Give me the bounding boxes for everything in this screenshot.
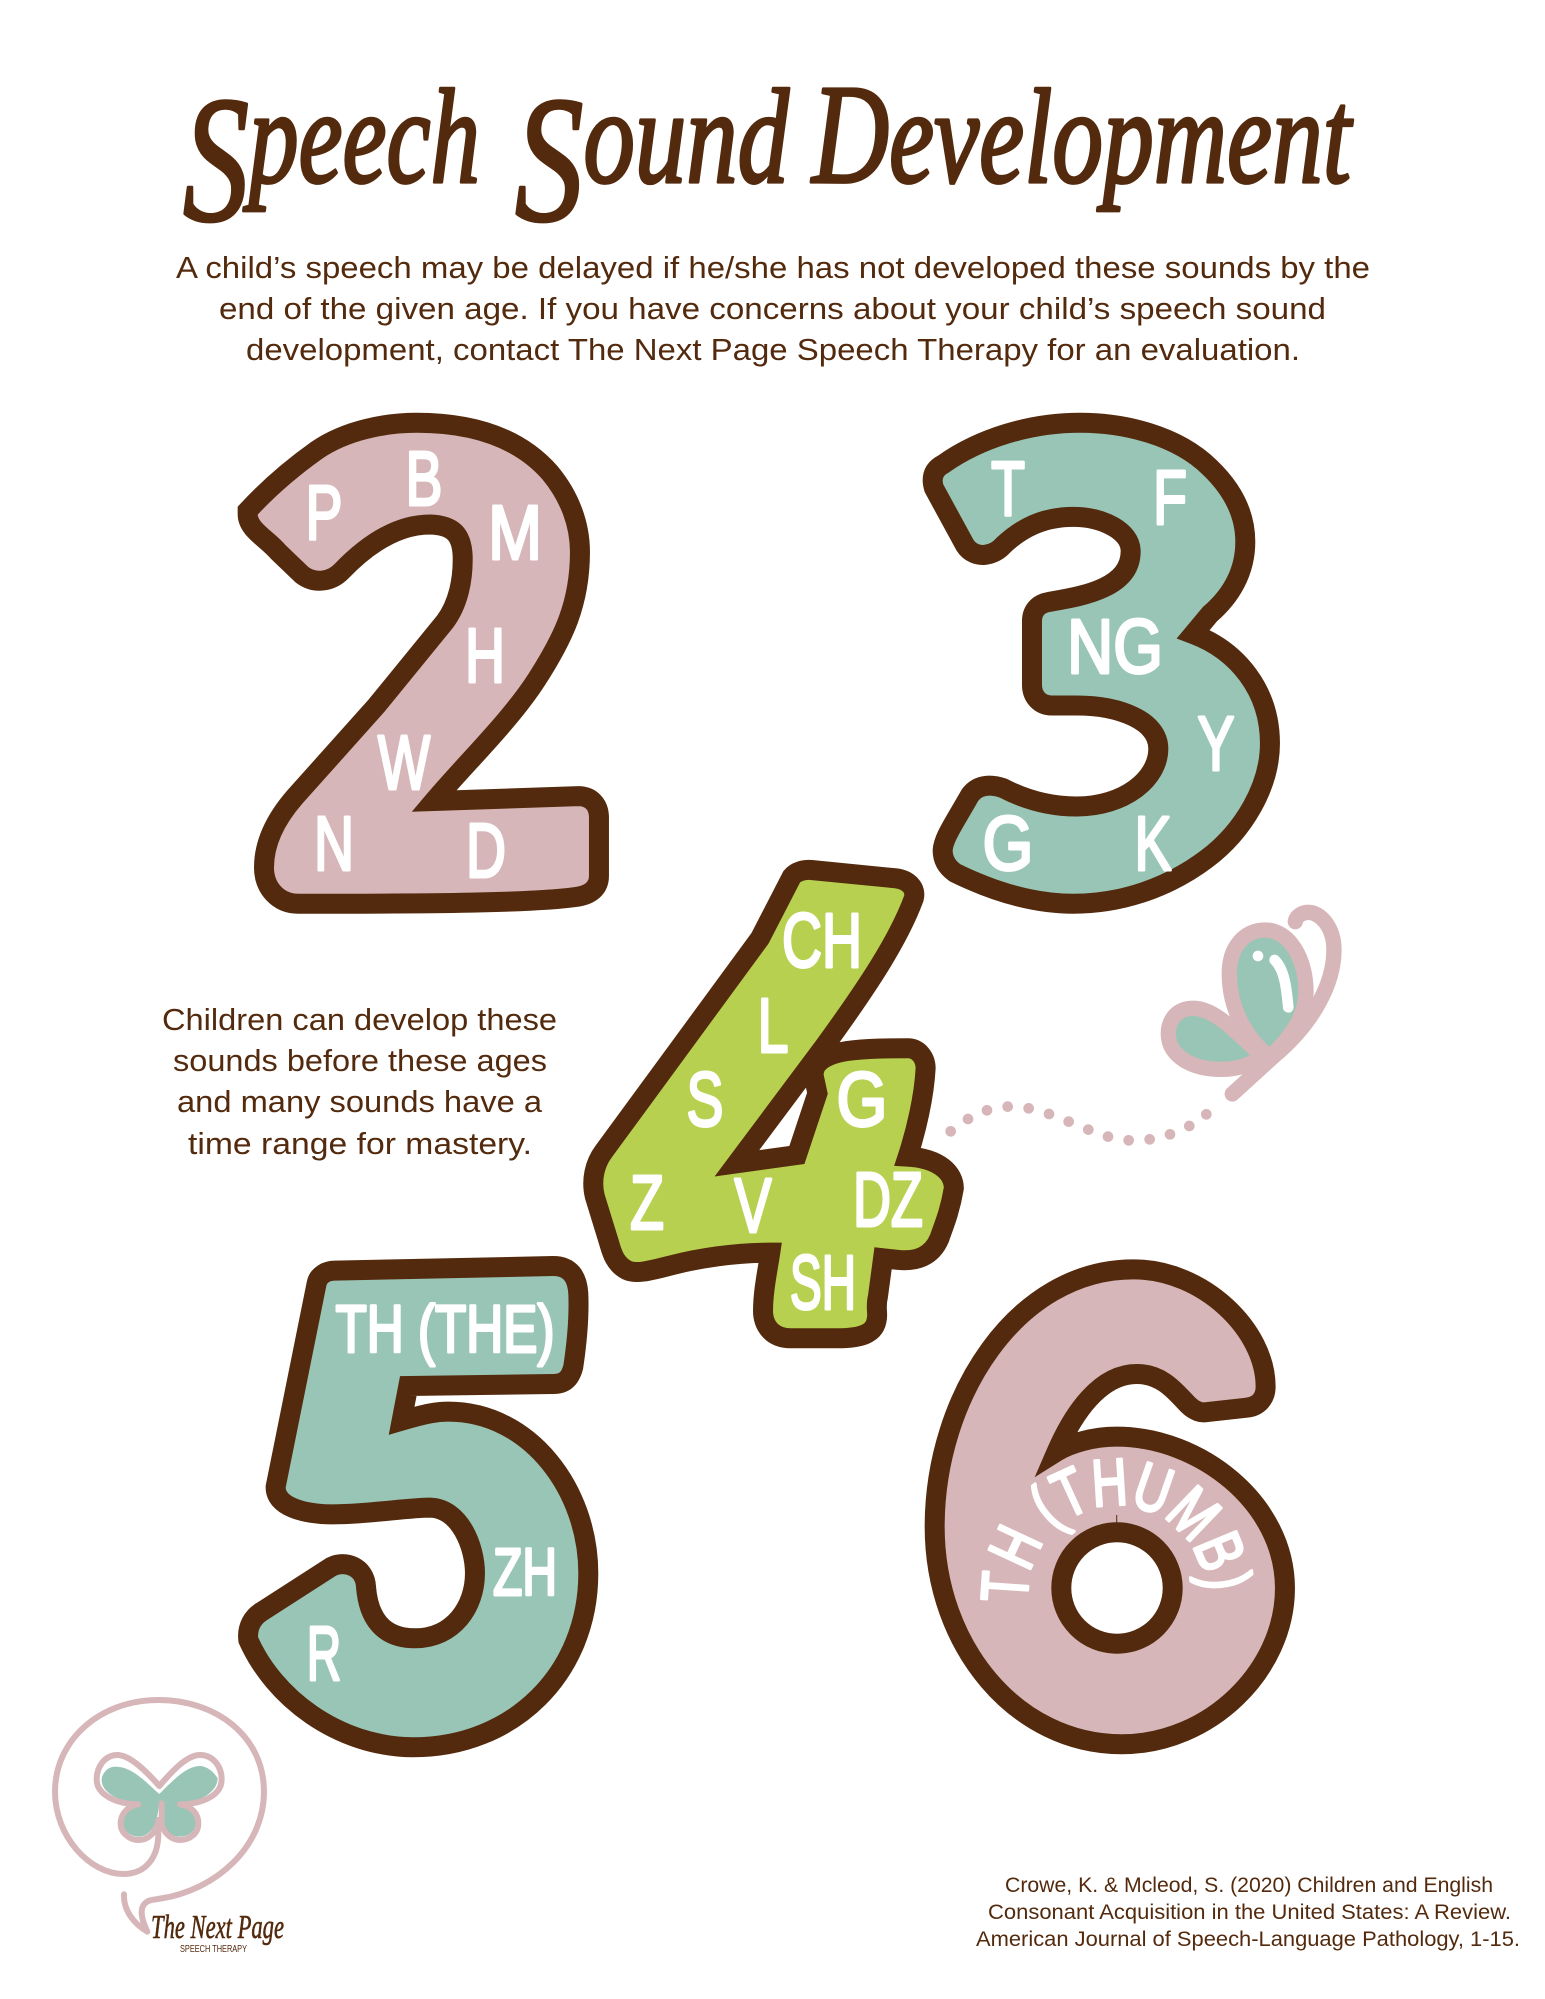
citation: Consonant Acquisition in the United States: A Review.	[988, 1900, 1511, 1924]
sounds for age 3: T	[991, 446, 1025, 532]
intro text	[176, 250, 1370, 367]
digit 6 counter hole	[1061, 1532, 1173, 1644]
sounds for age 4: S	[687, 1057, 723, 1143]
digit 5 outline	[248, 1266, 588, 1747]
sounds for age 4: SH	[790, 1239, 856, 1326]
sounds for age 4: L	[758, 983, 788, 1069]
icon: butterfly	[1168, 912, 1334, 1094]
dotted flight path	[945, 1101, 1212, 1146]
sounds for age 4: Z	[630, 1160, 664, 1246]
sounds for age 4: V	[735, 1163, 772, 1249]
sounds for age 3: K	[1135, 801, 1171, 887]
sounds for age 3: NG	[1067, 603, 1163, 689]
small tick above counter	[1116, 1515, 1118, 1525]
sounds for age 4: G	[837, 1057, 887, 1143]
citation: American Journal of Speech-Language Pathology, 1-15.	[976, 1927, 1520, 1951]
sounds for age 5: ZH	[493, 1535, 557, 1610]
intro text: development, contact The Next Page Speech Therapy for an evaluation.	[246, 332, 1300, 367]
title: ound	[584, 63, 789, 212]
digit 6 outline	[935, 1269, 1285, 1744]
logo tagline: SPEECH THERAPY	[180, 1944, 247, 1955]
sounds for age 2: P	[306, 470, 342, 556]
sounds for age 2: B	[406, 436, 442, 522]
sounds for age 3: G	[983, 801, 1033, 887]
side note text: Children can develop these	[162, 1002, 557, 1037]
side note text	[162, 1002, 557, 1161]
side note text: and many sounds have a	[177, 1084, 543, 1119]
title	[183, 55, 1354, 259]
title: peech	[243, 63, 480, 212]
logo butterfly	[97, 1755, 222, 1840]
sounds for age 3	[983, 446, 1234, 887]
title: S	[183, 60, 249, 259]
sounds for age 3: Y	[1198, 701, 1234, 787]
sounds for age 3: F	[1153, 455, 1187, 541]
citation	[976, 1873, 1520, 1951]
sounds for age 2: D	[466, 808, 506, 894]
digit 3 outline	[933, 423, 1270, 904]
logo speech bubble	[55, 1700, 264, 1932]
citation: Crowe, K. & Mcleod, S. (2020) Children and English	[1005, 1873, 1493, 1897]
sounds for age 2	[306, 436, 542, 894]
side note text: time range for mastery.	[188, 1126, 532, 1161]
digit 4 with sounds	[593, 870, 954, 1338]
title: S	[515, 60, 584, 259]
logo: The Next Page	[55, 1700, 284, 1955]
sounds for age 5	[307, 1292, 557, 1697]
digit 3 with sounds	[933, 423, 1270, 904]
digit 5 with sounds	[248, 1266, 588, 1747]
logo wordmark: The Next Page	[151, 1909, 284, 1946]
sounds for age 2: H	[465, 613, 505, 699]
digit 2 outline	[248, 423, 599, 904]
title: Development	[810, 55, 1354, 213]
sounds for age 2: N	[314, 801, 354, 887]
curved sound label: TH (THUMB)	[980, 1458, 1254, 1600]
sounds for age 4: DZ	[853, 1156, 923, 1242]
sounds for age 4: CH	[782, 898, 862, 984]
intro text: A child’s speech may be delayed if he/she has not developed these sounds by the	[176, 250, 1370, 285]
sounds for age 2: W	[378, 720, 431, 806]
sounds for age 5: R	[307, 1610, 341, 1697]
intro text: end of the given age. If you have concerns about your child’s speech sound	[219, 291, 1326, 326]
sounds for age 5: TH (THE)	[336, 1292, 554, 1367]
sounds for age 2: M	[488, 491, 542, 576]
digit 4 outline	[593, 870, 954, 1338]
digit 6 with sound	[924, 1259, 1295, 1754]
side note text: sounds before these ages	[173, 1043, 547, 1078]
digit 2 with sounds	[248, 423, 599, 904]
sounds for age 4	[630, 898, 923, 1326]
